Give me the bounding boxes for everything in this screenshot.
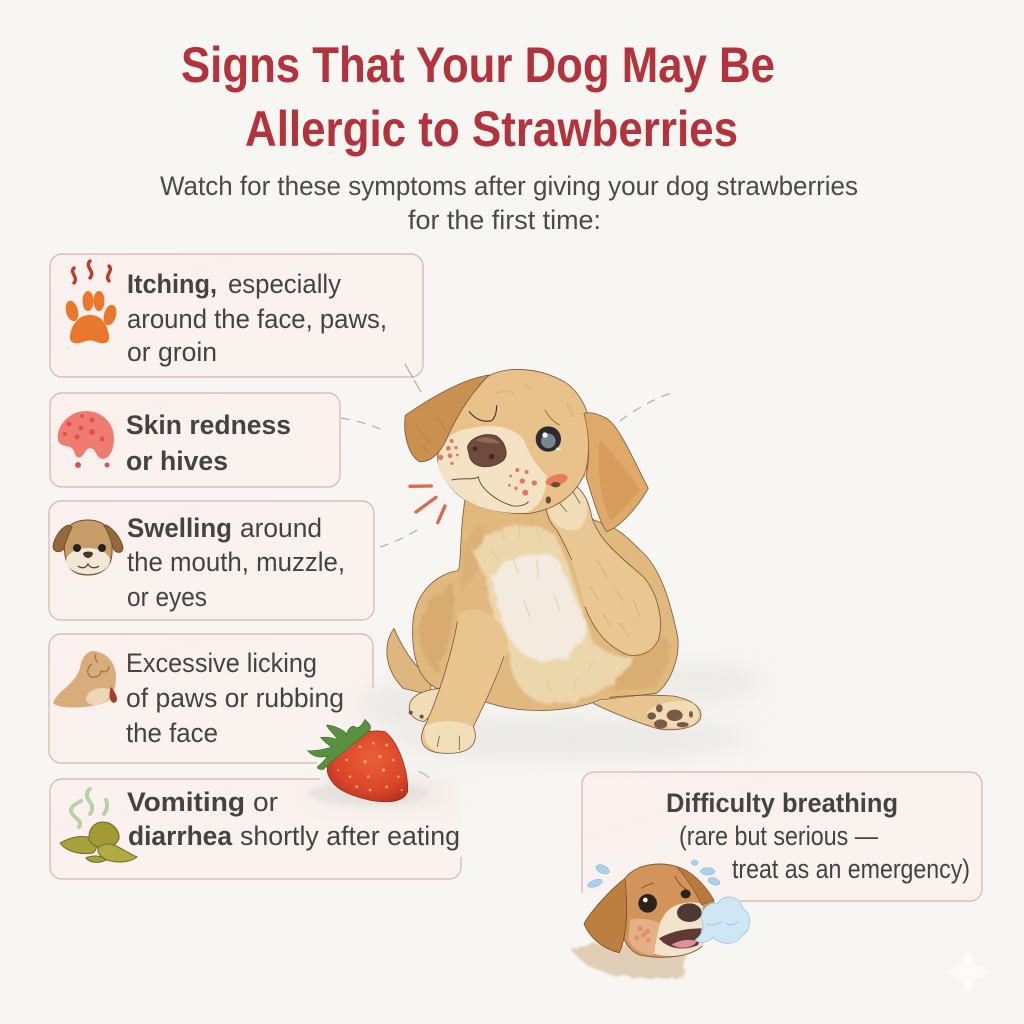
- text: itching: Itching,: [127, 269, 217, 299]
- text: difficulty breathing: Difficulty breathing: [666, 788, 898, 818]
- raised arm and paw: [546, 482, 660, 655]
- icon: hives: [58, 411, 114, 468]
- text: swelling: or eyes: [127, 582, 207, 612]
- right ear: [584, 413, 648, 532]
- torso: [413, 500, 678, 710]
- icon: swollen dog face: [53, 520, 123, 575]
- strawberry leaves: [308, 719, 370, 769]
- open eye: [536, 410, 563, 452]
- scratch marks: [410, 486, 445, 523]
- front leg: [421, 610, 508, 753]
- fur shading: [419, 523, 670, 692]
- panel: skin redness: [50, 393, 340, 487]
- mouth: [452, 477, 528, 506]
- panel: vomiting: [50, 779, 461, 879]
- text: licking: the face: [126, 718, 218, 748]
- cheek spots: [634, 926, 651, 942]
- text: vomiting: diarrhea: [128, 821, 233, 851]
- text: swelling: Swelling: [127, 513, 232, 543]
- text: licking: of paws or rubbing: [126, 683, 344, 713]
- text: difficulty breathing: [666, 788, 970, 884]
- watermark sparkle: [944, 948, 992, 996]
- head: [618, 864, 714, 957]
- text: itching: especially: [228, 269, 341, 299]
- neck fur: [570, 943, 687, 978]
- text: itching: or groin: [127, 337, 217, 367]
- subtitle: for the first time:: [408, 205, 601, 235]
- dashed connectors: [341, 364, 674, 547]
- title: Signs That Your Dog May Be: [181, 37, 775, 93]
- tail: [387, 628, 432, 695]
- far ear: [677, 867, 714, 905]
- chest fur: [473, 525, 635, 703]
- text: itching: [127, 269, 387, 367]
- icon: itchy paw: [63, 261, 119, 343]
- muzzle: [653, 902, 703, 956]
- subtitle: Watch for these symptoms after giving your dog strawberries: [160, 171, 858, 201]
- small breathing dog: [570, 860, 750, 978]
- text: skin redness: Skin redness: [126, 410, 291, 440]
- breath puff: [695, 897, 750, 943]
- sweat drops: [587, 860, 721, 889]
- nose: [467, 435, 506, 467]
- paw toes at face: [546, 482, 560, 504]
- text: swelling: [127, 513, 345, 612]
- hind leg right: [593, 695, 701, 730]
- text: licking: [126, 648, 344, 748]
- eyes: [642, 877, 688, 891]
- text: swelling: around: [240, 513, 322, 543]
- panel: swelling: [49, 501, 374, 620]
- icon: paw being licked: [53, 651, 117, 708]
- strawberry: [308, 719, 429, 805]
- hind paw left: [409, 688, 447, 722]
- text: swelling: the mouth, muzzle,: [127, 547, 345, 577]
- left ear: [405, 375, 489, 462]
- text: vomiting: or: [253, 787, 278, 817]
- panel: excessive licking: [49, 634, 373, 763]
- closed eye: [469, 406, 497, 421]
- text: skin redness: [126, 410, 291, 476]
- text: skin redness: or hives: [126, 446, 228, 476]
- main illustration: scratching puppy: [387, 369, 701, 753]
- head: [405, 369, 648, 532]
- title: [181, 37, 775, 157]
- nose: [677, 903, 702, 922]
- text: licking: Excessive licking: [126, 648, 317, 678]
- near ear: [584, 878, 627, 953]
- subtitle: [160, 171, 858, 235]
- panel: difficulty breathing: [582, 772, 982, 901]
- panel: itching: [50, 254, 423, 377]
- icon: vomit leaves with odour: [60, 789, 137, 862]
- ground shadow: [315, 664, 765, 806]
- text: difficulty breathing: (rare but serious —: [679, 821, 878, 851]
- strawberry fruit: [327, 731, 408, 802]
- title: Allergic to Strawberries: [245, 101, 738, 157]
- text: vomiting: Vomiting: [127, 787, 245, 817]
- text: vomiting: shortly after eating: [240, 821, 460, 851]
- mouth: [659, 928, 702, 948]
- text: itching: around the face, paws,: [127, 304, 387, 334]
- text: vomiting: [127, 787, 460, 851]
- text: difficulty breathing: treat as an emergency): [732, 854, 970, 884]
- irritated spots: [438, 439, 569, 496]
